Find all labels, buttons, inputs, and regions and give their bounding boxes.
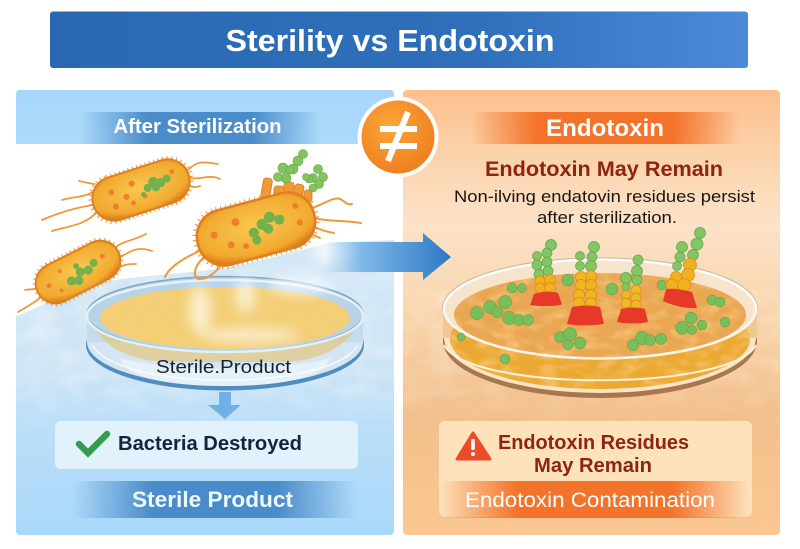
icon: check mark [79,434,107,453]
arrow: down to result [208,392,241,419]
footer band: sterile product: Sterile Product [132,487,294,512]
tower 3 [617,255,648,324]
description text: Non-ilving endatovin residues persist [454,187,755,206]
tower 1 [530,240,562,306]
warning box: Endotoxin Residues [498,432,689,454]
header band: after sterilization: After Sterilization [114,116,282,138]
panel: after sterilization [16,90,394,535]
sandy ground texture [404,291,780,408]
footer band: endotoxin contamination: Endotoxin Contamination [465,489,715,512]
petri dish: contaminated culture [443,258,757,398]
icon: warning triangle [457,433,490,459]
warning box [439,421,752,517]
petri dish: sterile product [86,276,364,390]
frost texture [26,275,393,405]
tower 2 [567,242,604,326]
steam [189,236,359,342]
heading: endotoxin may remain: Endotoxin May Remain [485,158,723,181]
header band: endotoxin: Endotoxin [546,115,664,142]
bacterium: lower left [18,234,152,312]
result box: bacteria destroyed: Bacteria Destroyed [118,433,302,455]
endotoxin towers [530,228,706,326]
tower 4 [663,228,706,308]
description text: after sterilization. [537,208,677,227]
illustration: bacteria [18,150,361,312]
label: sterile product: Sterile.Product [156,357,291,377]
title banner [50,12,748,68]
footer band: endotoxin contamination [440,481,750,518]
header band: after sterilization [16,90,394,144]
endotoxin chain on bacterium [260,150,328,202]
icon: not-equal badge [358,96,438,178]
description text [456,190,755,223]
green bacteria clusters on culture [457,274,730,364]
warning box: May Remain [534,455,652,477]
white background behind bacteria [16,144,394,316]
footer band: sterile product [72,481,357,518]
result box: bacteria destroyed [55,421,358,469]
arrow: sterilization to endotoxin [325,233,451,280]
bacterium: large right [165,150,361,279]
panel: endotoxin [403,90,780,535]
header band: endotoxin [470,112,740,144]
title banner: Sterility vs Endotoxin [226,23,554,58]
bacterium: top left [42,153,220,231]
